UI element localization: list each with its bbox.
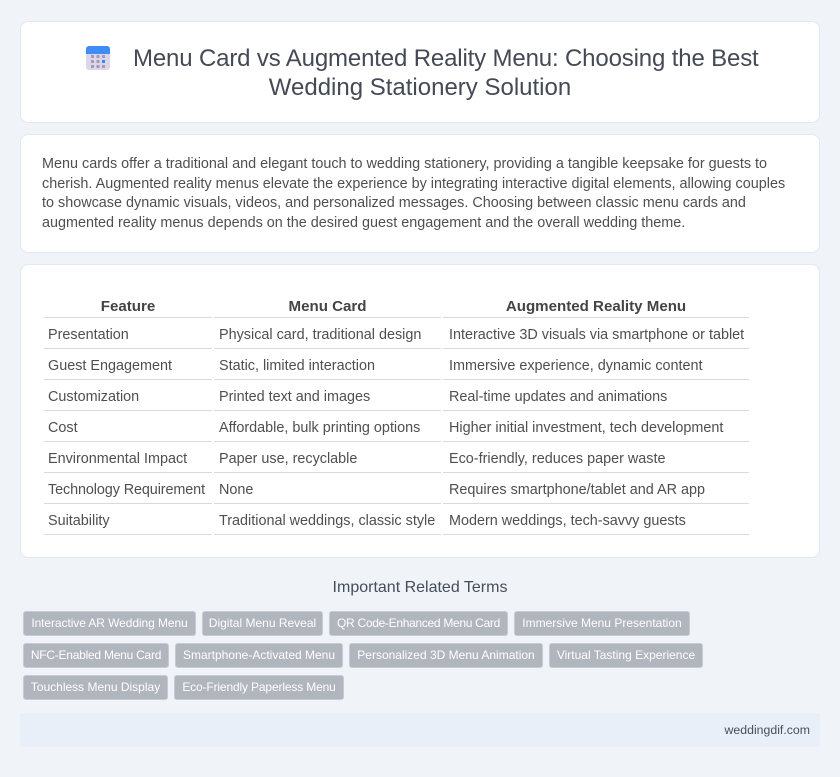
tag — [349, 643, 543, 668]
row: environmental impact: Environmental Impact — [48, 451, 187, 467]
tag — [514, 611, 690, 636]
tag: QR Code-Enhanced Menu Card — [337, 616, 500, 630]
table header: Feature — [101, 298, 155, 315]
footer source text: weddingdif.com — [725, 723, 810, 737]
tag — [23, 611, 196, 636]
row: presentation: Presentation — [48, 327, 129, 343]
tag: Personalized 3D Menu Animation — [357, 648, 535, 662]
title — [133, 45, 759, 100]
tag: Immersive Menu Presentation — [522, 616, 682, 630]
heading: related terms: Important Related Terms — [333, 579, 507, 596]
table header: Menu Card — [288, 298, 366, 315]
text block: introduction: to showcase dynamic visuals, videos, and personalized messages. Choosing between classic menu cards and — [42, 195, 746, 211]
row: environmental impact: Paper use, recyclable — [219, 451, 357, 467]
row: customization — [44, 389, 749, 411]
icon: calendar menu — [86, 46, 110, 70]
tag: Smartphone-Activated Menu — [183, 648, 335, 662]
tag: NFC-Enabled Menu Card — [31, 648, 161, 662]
row: technology requirement: Technology Requirement — [48, 482, 205, 498]
tag: Digital Menu Reveal — [209, 616, 316, 630]
table header — [44, 298, 749, 318]
row: cost: Cost — [48, 420, 78, 436]
text block: introduction — [42, 156, 785, 230]
text block: introduction: cherish. Augmented reality menus elevate the experience by integrating interactive digital elements, allowing couples — [42, 176, 785, 192]
row: technology requirement: Requires smartphone/tablet and AR app — [449, 482, 705, 498]
tag: Eco-Friendly Paperless Menu — [182, 680, 336, 694]
tag — [202, 611, 323, 636]
row: guest engagement: Immersive experience, dynamic content — [449, 358, 703, 374]
tag: Interactive AR Wedding Menu — [31, 616, 188, 630]
row: presentation: Physical card, traditional design — [219, 327, 421, 343]
tag: Virtual Tasting Experience — [557, 648, 695, 662]
tag — [549, 643, 703, 668]
tag: Touchless Menu Display — [31, 680, 160, 694]
row: customization: Printed text and images — [219, 389, 370, 405]
tag — [23, 675, 168, 700]
row: suitability — [44, 513, 749, 535]
panel: introduction — [20, 134, 820, 253]
row: guest engagement: Guest Engagement — [48, 358, 172, 374]
row: cost — [44, 420, 749, 442]
row: presentation: Interactive 3D visuals via smartphone or tablet — [449, 327, 744, 343]
table header: Augmented Reality Menu — [506, 298, 686, 315]
tag — [23, 643, 169, 668]
row: environmental impact — [44, 451, 749, 473]
text block: introduction: augmented reality menus depends on the desired guest engagement and the overall wedding theme. — [42, 214, 685, 230]
panel: comparison table — [20, 264, 820, 558]
tag list: related terms — [23, 611, 703, 700]
row: customization: Real-time updates and animations — [449, 389, 667, 405]
tag — [174, 675, 344, 700]
tag — [175, 643, 343, 668]
row: presentation — [44, 327, 749, 349]
row: technology requirement — [44, 482, 749, 504]
panel: header — [20, 21, 820, 123]
row: guest engagement: Static, limited interaction — [219, 358, 375, 374]
tag — [329, 611, 508, 636]
footer bar — [20, 713, 820, 747]
text block: introduction: Menu cards offer a traditional and elegant touch to wedding stationery, providing a tangible keepsake for guests to — [42, 156, 767, 172]
row: cost: Higher initial investment, tech development — [449, 420, 723, 436]
table: comparison — [44, 298, 749, 535]
row: suitability: Suitability — [48, 513, 110, 529]
row: customization: Customization — [48, 389, 139, 405]
row: suitability: Traditional weddings, classic style — [219, 513, 435, 529]
row: environmental impact: Eco-friendly, reduces paper waste — [449, 451, 666, 467]
row: cost: Affordable, bulk printing options — [219, 420, 420, 436]
row: guest engagement — [44, 358, 749, 380]
row: suitability: Modern weddings, tech-savvy guests — [449, 513, 686, 529]
row: technology requirement: None — [219, 482, 253, 498]
title: Wedding Stationery Solution — [269, 74, 571, 100]
title: Menu Card vs Augmented Reality Menu: Choosing the Best — [133, 45, 759, 72]
